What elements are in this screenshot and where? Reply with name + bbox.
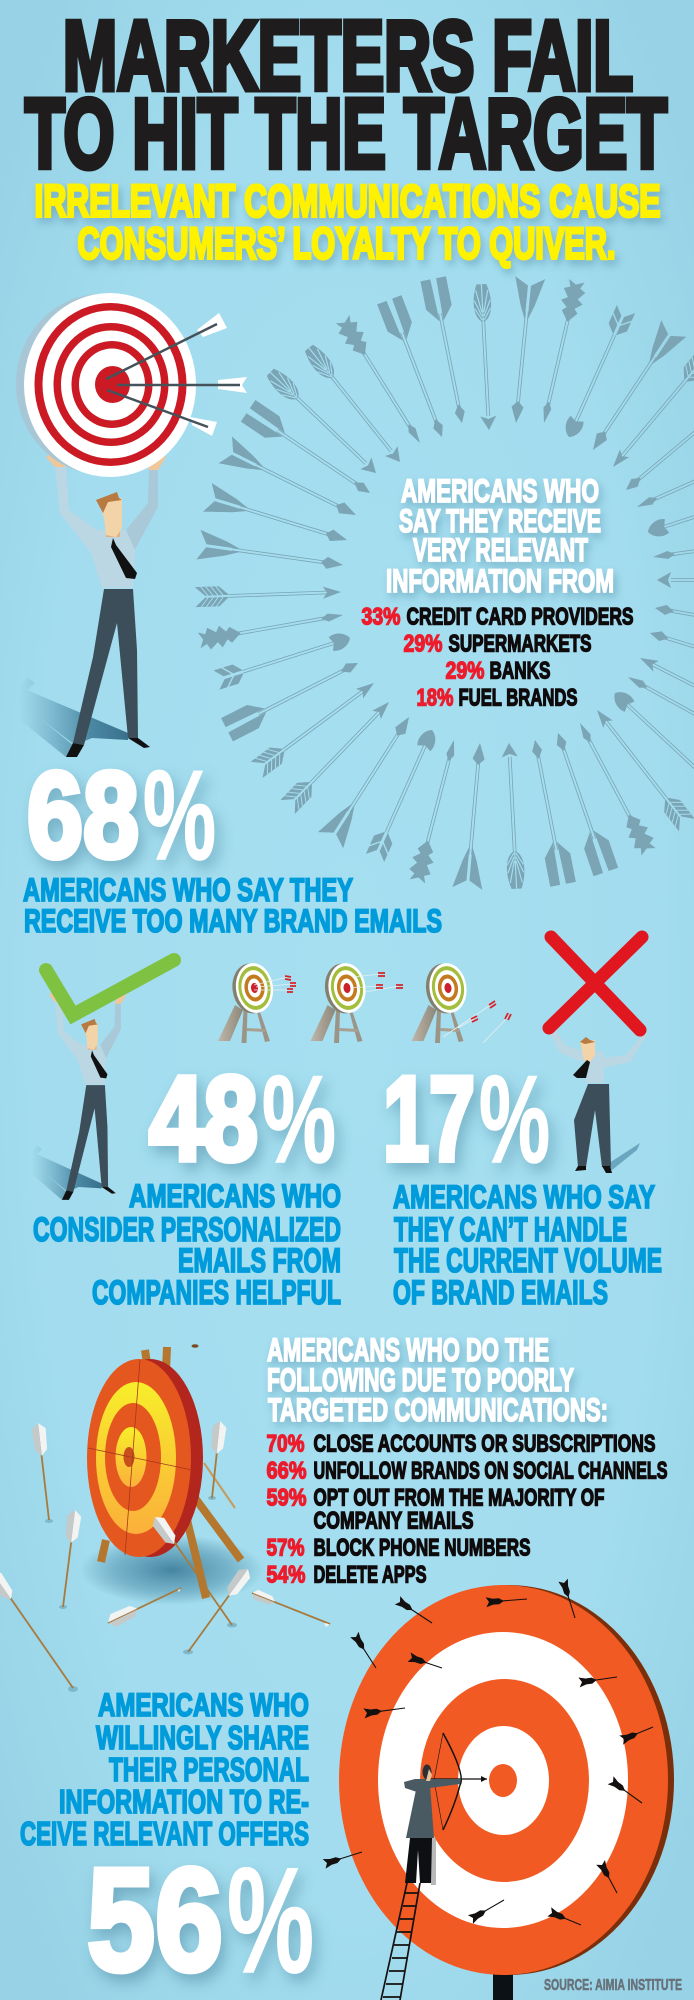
- icon: target hit: [218, 961, 296, 1043]
- caption: 56%: AMERICANS WHO: [98, 1687, 309, 1723]
- list: relevant sources: 18%: [416, 684, 454, 712]
- list: relevant sources: [362, 604, 634, 712]
- icon: red X: [549, 937, 642, 1030]
- list: actions taken: 70%: [266, 1430, 305, 1458]
- list: relevant sources: 29%: [404, 630, 443, 658]
- list: actions taken: 54%: [266, 1562, 306, 1588]
- heading: poorly targeted communications: [267, 1332, 608, 1428]
- list: actions taken: [266, 1430, 668, 1588]
- illustration: three small targets: [218, 961, 511, 1043]
- shadow: [606, 1143, 640, 1170]
- list: relevant sources: 33%: [362, 604, 401, 630]
- icon: target near miss: [310, 961, 403, 1043]
- illustration: man holding target: [4, 293, 247, 757]
- stat: 56%: 56: [87, 1838, 223, 2000]
- caption: 17%: [393, 1179, 662, 1312]
- arrow ring: [195, 276, 694, 890]
- list: relevant sources: BANKS: [490, 658, 550, 684]
- caption: 68%: AMERICANS WHO SAY THEY: [23, 872, 353, 908]
- stat: 68%: 68: [27, 747, 139, 883]
- archer: [404, 1733, 487, 1885]
- ladder: [381, 1883, 420, 2000]
- subtitle: [34, 176, 660, 268]
- list: actions taken: 57%: [266, 1534, 305, 1562]
- heading: relevant information: AMERICANS WHO: [401, 473, 599, 509]
- illustration: man with red X: [549, 937, 648, 1173]
- stat: 17% percent sign: %: [479, 1051, 550, 1189]
- caption: 48%: CONSIDER PERSONALIZED: [33, 1211, 341, 1249]
- list: actions taken: DELETE APPS: [314, 1562, 426, 1588]
- caption: 56%: WILLINGLY SHARE: [96, 1720, 309, 1757]
- list: actions taken: 59%: [266, 1484, 307, 1512]
- list: actions taken: 66%: [266, 1458, 307, 1484]
- caption: 48%: COMPANIES HELPFUL: [92, 1274, 341, 1312]
- heading: relevant information: [386, 473, 614, 599]
- stat: 48% percent sign: %: [262, 1051, 336, 1189]
- list: relevant sources: FUEL BRANDS: [458, 684, 578, 712]
- scattered arrows: [0, 1420, 330, 1692]
- caption: 68%: RECEIVE TOO MANY BRAND EMAILS: [24, 903, 442, 939]
- caption: 48%: [33, 1178, 341, 1312]
- heading: relevant information: VERY RELEVANT: [413, 532, 588, 568]
- icon: red bullseye with arrows: [16, 293, 247, 477]
- caption: 56%: CEIVE RELEVANT OFFERS: [20, 1816, 309, 1853]
- caption: 56%: THEIR PERSONAL: [109, 1752, 309, 1789]
- caption: 48%: AMERICANS WHO: [129, 1178, 341, 1214]
- caption: 48%: EMAILS FROM: [178, 1242, 341, 1280]
- title: [25, 1, 667, 189]
- small black arrows: [323, 1579, 653, 1925]
- stat: 56% percent sign: %: [227, 1836, 314, 2000]
- list: relevant sources: SUPERMARKETS: [448, 630, 592, 658]
- stat: 17%: 17: [383, 1052, 475, 1186]
- stat: 48%: 48: [149, 1052, 258, 1186]
- illustration: orange target with scattered arrows: [0, 1344, 330, 1692]
- heading: poorly targeted communications: AMERICANS WHO DO THE: [267, 1332, 549, 1368]
- illustration: large target with archer: [323, 1579, 674, 2000]
- illustration: man with check mark: [22, 960, 174, 1200]
- list: actions taken: COMPANY EMAILS: [314, 1508, 474, 1534]
- list: actions taken: BLOCK PHONE NUMBERS: [314, 1534, 530, 1562]
- list: relevant sources: 29%: [446, 658, 485, 684]
- caption: 68%: [23, 872, 442, 939]
- caption: 56%: INFORMATION TO RE-: [59, 1784, 309, 1821]
- icon: target miss: [412, 961, 511, 1043]
- icon: green check mark: [46, 960, 174, 1015]
- caption: 56%: [20, 1687, 309, 1853]
- stat: 68% percent sign: %: [143, 744, 216, 886]
